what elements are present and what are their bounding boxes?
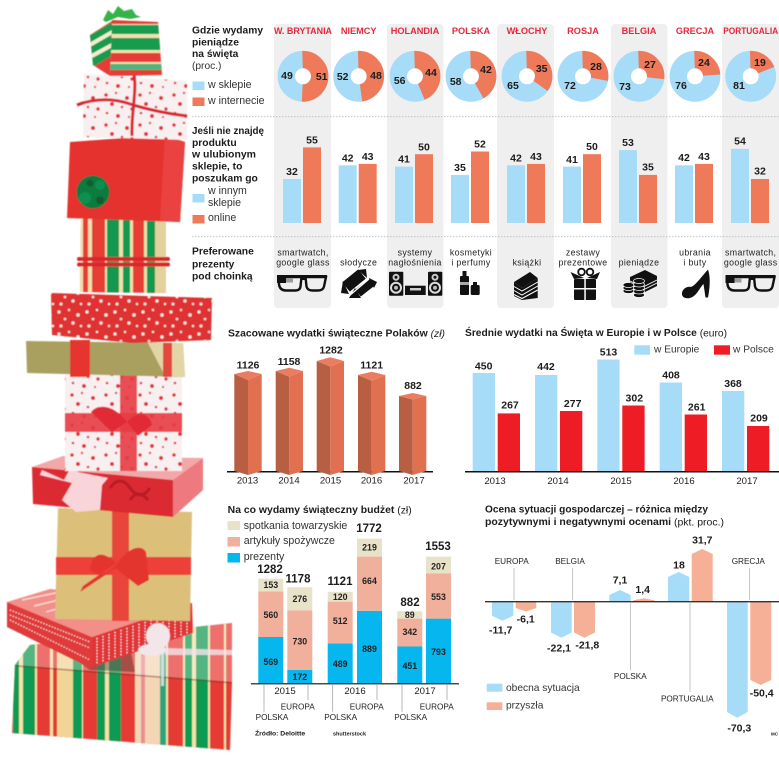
gift: white box with red dots and ribbon [65,374,182,471]
source note: Źródło: Deloitte [255,728,305,738]
year labels: 2015 [320,476,341,486]
chart: Christmas budget breakdown [228,505,459,738]
stack: 2015 Europa: 730 [292,636,307,646]
bar values: 7,1 [613,575,627,587]
chart: average spending Europe and Poland [465,326,779,487]
bar values: 31,7 [692,535,713,547]
donut charts [286,60,767,93]
bars: Portugalia: 54 [734,136,746,148]
legend: prezenty [244,551,285,563]
gift labels: systemy [398,247,433,257]
bars: Holandia [395,142,433,223]
icon: glasses [277,275,327,290]
bars: Grecja [675,151,713,223]
bars: Polska [451,138,489,223]
gift labels: prezentowe [559,257,607,267]
country headers: GRECJA [676,26,715,36]
stack: 2016 Polska [328,592,353,683]
donut values: 27 [644,59,656,71]
legend: spotkania towarzyskie [244,520,347,532]
bar values: 18 [673,560,685,572]
axis labels: POLSKA [394,713,428,722]
legend: shop or internet: w sklepie [207,79,252,91]
year labels: 2014 [278,476,300,486]
column values [237,345,422,392]
icon: audio system [389,272,442,296]
donut: Niemcy [342,60,375,93]
chart: estimated Polish Christmas spending [227,328,445,486]
bars 2016: 261 [688,402,706,414]
heading: if product not found [191,126,264,184]
icon: candies [341,269,377,298]
heading: where we spend: (proc.) [192,61,221,72]
column 2016 [358,372,385,475]
bar values: -21,8 [575,640,599,652]
gift labels: smartwatch, [725,247,776,257]
stack: 2017 Europa: 207 [431,562,446,572]
donut values: 35 [536,63,548,75]
gift labels: słodycze [340,257,377,267]
icon: high heel shoe [682,270,710,298]
year labels: 2013 [484,476,506,487]
bars: Portugalia [668,549,713,601]
legend: przyszła [506,700,544,712]
bars: Belgia [619,137,657,223]
stack: 2015 Polska: 560 [263,610,278,620]
gift: large striped box at the bottom [11,622,233,751]
stack: 2015 Polska: 569 [263,657,278,667]
heading: preferred gifts: prezenty [192,260,235,270]
gift labels [276,247,778,267]
bars: Holandia: 41 [398,154,410,166]
donut: Włochy [510,60,544,93]
donut values: 48 [370,70,382,82]
icon: glasses [726,275,776,290]
gift labels: i buty [683,257,707,267]
column 2017 [399,393,426,475]
column values: 1282 [319,345,343,357]
column values: 882 [404,380,422,392]
stack: 2015 Polska [258,579,283,683]
gift labels: google glass [276,257,330,267]
gift labels: smartwatch, [277,247,329,257]
year labels: 2016 [361,476,382,486]
chart title: pozytywnymi i negatywnymi ocenami (pkt. proc.) [485,517,724,528]
donut: Polska [454,60,488,93]
donut: Portugalia [734,60,767,93]
heading: if product not found: Jeśli nie znajdę [192,126,264,137]
bars: Niemcy [339,151,377,223]
country headers: BELGIA [622,26,657,36]
stack: 2017 Polska: 451 [402,661,417,671]
bow: green rosette [76,176,110,208]
stack totals: 882 [400,597,420,609]
donut values: 65 [507,80,519,92]
legend: shop or internet: w internecie [207,95,265,107]
country headers: NIEMCY [341,26,377,36]
bars 2013: 267 [501,399,519,411]
legend: artykuły spożywcze [244,535,335,547]
stack: 2016 Polska: 512 [333,616,348,626]
stack: 2016 Europa: 219 [362,542,377,552]
bars 2016: 408 [662,370,680,382]
heading: preferred gifts: Preferowane [192,246,254,258]
bars: Grecja [727,602,771,718]
bars: Portugalia [731,136,769,223]
bars 2015 [597,346,645,471]
legend: other shop or online: online [208,212,236,224]
stack: 2016 Europa: 664 [362,576,377,586]
country headers: HOLANDIA [391,26,440,36]
bars: Belgia: 53 [622,137,634,149]
bow: white bow on striped box [138,623,232,686]
donut values: 81 [733,80,745,92]
bars: W. Brytania: 55 [306,134,318,146]
bars: Grecja: 43 [698,151,710,163]
legend: w Europie [653,344,700,356]
gift: gold box with red ribbon [55,508,192,621]
donut values: 51 [316,71,328,83]
bars: Polska [609,590,654,601]
stack: 2016 Polska: 489 [333,659,348,669]
country headers: ROSJA [567,26,599,36]
bars: Holandia: 50 [418,142,430,154]
gift: red wrapped box with green bow [67,135,185,222]
country labels: BELGIA [555,557,585,566]
legend: other shop or online [192,185,247,224]
donut values: 44 [425,67,437,79]
bar charts per country [283,134,769,223]
stack: 2017 Europa: 553 [431,592,446,602]
year labels: 2014 [547,476,569,487]
year labels: 2017 [736,476,758,487]
heading: where we spend [192,26,263,72]
heading: if product not found: w ulubionym [191,150,256,160]
bar values: -11,7 [489,625,513,637]
heading: where we spend: na święta [192,49,239,60]
bars 2015: 302 [626,392,643,404]
bars 2015: 513 [600,346,617,358]
icon: books [514,272,538,300]
axis labels: EUROPA [350,702,384,712]
bars 2013: 450 [475,361,493,373]
bars: Portugalia: 32 [754,166,766,178]
bars 2014 [535,361,582,471]
column values: 1121 [360,360,383,372]
bars: Rosja: 41 [566,154,578,166]
stack: 2016 Polska: 120 [333,592,348,602]
donut values: 42 [480,64,492,76]
gift labels: książki [513,257,541,267]
heading: if product not found: sklepie, to [192,162,242,172]
bars 2016 [660,370,707,471]
column values: 1158 [278,356,301,368]
gift: red box with white dotted stripes [7,589,193,668]
bars 2017 [722,378,769,471]
gift labels: kosmetyki [450,247,492,257]
legend: w Polsce [732,344,774,356]
bars: Włochy [507,151,545,223]
gift labels: ubrania [679,247,711,257]
axis labels: 2016 [344,686,366,697]
gift tower photo [7,6,240,760]
gift: striped green and red box [77,216,170,294]
chart: economic situation assessment [485,504,779,736]
year labels: 2013 [237,476,258,486]
stack totals: 1178 [286,573,311,585]
bars: Niemcy: 43 [362,151,374,163]
donut: Holandia [398,60,432,93]
leader lines [514,568,750,692]
gift: striped green box on top [88,6,165,78]
bars: Europa [492,602,536,621]
heading: where we spend: pieniądze [192,38,239,48]
bars: Włochy: 42 [510,152,522,164]
donut: Rosja [566,60,600,93]
bars: Włochy: 43 [530,151,542,163]
axis labels: POLSKA [256,713,289,722]
donut values: 58 [450,76,462,88]
icon: cosmetics [460,271,480,295]
stack: 2016 Europa: 889 [362,644,377,654]
donut: Belgia [622,60,656,93]
stack: 2015 Europa: 276 [292,594,307,604]
stack: 2017 Polska [397,610,422,683]
bars 2017: 209 [750,412,768,424]
year labels [484,476,758,487]
legend [228,520,347,563]
year labels: 2015 [610,476,632,487]
year labels: 2017 [403,476,425,486]
axis labels: EUROPA [281,702,315,712]
heading: preferred gifts [192,246,254,282]
axis labels: 2015 [274,686,296,697]
legend: other shop or online: w innym [207,185,247,197]
country labels: EUROPA [495,557,529,566]
gift labels: google glass [724,257,778,267]
donut: Grecja [678,60,712,93]
heading: if product not found: produktu [192,138,237,149]
year labels [237,476,425,486]
bars 2013 [473,361,520,471]
stack totals: 1772 [356,523,382,535]
bars: Polska: 52 [474,138,486,150]
gift: white box with red dots and red string [77,74,187,140]
stack: 2017 Polska: 89 [405,610,415,620]
gift labels: i perfumy [451,257,491,267]
legend: other shop or online: sklepie [208,197,241,209]
stack totals: 1553 [425,541,451,553]
axis labels [256,686,454,722]
gift: olive box with red ribbon [26,340,185,377]
donut values: 19 [754,57,766,69]
bars: W. Brytania: 32 [286,166,298,178]
stack: 2016 Europa [357,539,382,683]
stack: 2017 Polska: 342 [402,627,417,637]
chart title: Ocena sytuacji gospodarczej – różnica między [485,504,708,516]
gift labels: nagłośnienia [388,257,442,267]
photo credit: shutterstock [333,732,367,738]
chart title: Średnie wydatki na Święta w Europie i w Polsce (euro) [465,326,727,339]
country labels [495,557,765,704]
stack: 2015 Europa: 172 [292,672,307,682]
bar values: -70,3 [727,722,751,734]
chart title: Szacowane wydatki świąteczne Polaków (zł) [228,328,445,340]
donut values [281,57,766,93]
axis labels: 2017 [414,686,436,697]
donut values: 49 [281,70,293,82]
column 2013 [234,371,262,475]
bar values: -22,1 [547,642,571,654]
icon: gift box [570,269,600,300]
heading: preferred gifts: pod choinką [192,272,253,282]
stack totals: 1121 [328,576,353,588]
stack totals [257,523,451,609]
bars: Polska: 35 [454,162,466,174]
donut values: 72 [564,80,576,92]
gift: red box with white dots [51,293,212,343]
country labels: PORTUGALIA [661,694,714,704]
legend: obecna sytuacja [506,683,580,694]
year labels: 2016 [673,476,695,487]
stack: 2017 Europa [426,557,451,683]
country headers: W. BRYTANIA [274,26,332,36]
bars: Grecja: 42 [678,152,690,164]
country labels: POLSKA [614,672,647,681]
donut values: 28 [590,61,602,73]
bars: Niemcy: 42 [342,152,354,164]
stack totals: 1282 [257,564,283,576]
bar values [489,535,774,734]
bar values: -6,1 [517,613,535,625]
bars: Belgia: 35 [642,162,654,174]
stack: 2015 Polska: 153 [263,580,278,590]
bars: Rosja [563,141,601,223]
country columns background [274,24,779,308]
donut values: 76 [675,80,687,92]
bars: Belgia [551,602,595,638]
legend: shop or internet [192,79,265,107]
chart title: Na co wydamy świąteczny budżet (zł) [228,505,412,516]
stack: 2015 Europa [287,587,312,683]
donut values: 52 [337,71,349,83]
column 2015 [317,357,344,475]
chart title [485,504,724,528]
bow: green ribbon on top [103,6,141,22]
bar values: -50,4 [750,687,774,699]
country headers [274,26,779,36]
country labels: GRECJA [732,557,765,566]
gift labels: zestawy [566,247,600,257]
donut values: 24 [698,57,710,69]
column 2014 [276,368,303,475]
bar values: 1,4 [635,584,650,596]
column values: 1126 [237,360,260,372]
country headers: WŁOCHY [507,26,547,36]
legend [634,344,774,356]
heading: where we spend: Gdzie wydamy [192,26,263,36]
axis labels: EUROPA [420,702,454,712]
donut values: 73 [619,81,631,93]
axis labels: POLSKA [324,713,358,722]
icon: coins and banknotes [623,270,657,298]
gift labels: pieniądze [619,257,659,267]
heading: if product not found: poszukam go [192,174,258,184]
author initials: MC [771,732,779,736]
bars: W. Brytania [283,134,321,223]
bars 2014: 442 [537,361,555,373]
donut: W. Brytania [286,60,320,93]
country headers: POLSKA [452,26,491,36]
legend [487,683,580,712]
gift: red patterned box with white bow [32,456,203,517]
stack: 2017 Europa: 793 [431,647,446,657]
bars: Rosja: 50 [586,141,598,153]
bars 2017: 368 [724,378,742,390]
donut values: 56 [394,75,406,87]
bars 2014: 277 [564,398,582,410]
